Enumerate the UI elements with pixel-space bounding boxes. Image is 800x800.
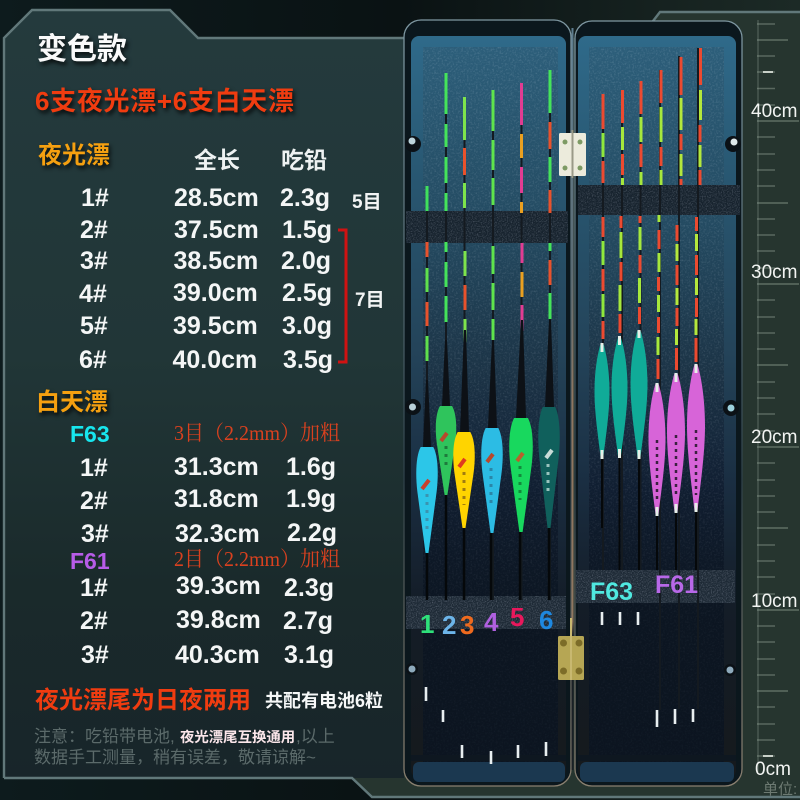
float F63-2: [612, 90, 628, 570]
box spine: [572, 28, 574, 770]
row 1: 1.6g: [286, 453, 336, 481]
label: F63 on box: F63: [590, 578, 633, 606]
row 6: 40.0cm: [172, 346, 257, 374]
row 1: 1#: [80, 454, 108, 482]
panel: right lid of float box: [575, 21, 742, 786]
float 2: [436, 73, 456, 600]
float 6: [538, 70, 560, 600]
label: 40cm: 40cm: [751, 101, 797, 122]
row 3: 2.0g: [281, 247, 331, 275]
row 4: 2.5g: [282, 279, 332, 307]
row 5: 3.0g: [282, 312, 332, 340]
row 1: 2.3g: [284, 574, 334, 602]
heading: night floats: 夜光漂: [38, 142, 110, 169]
panel: left lid of float box: [404, 20, 571, 786]
row 1: [81, 184, 330, 212]
column header: length: 全长: [194, 147, 240, 173]
row 5: 5#: [80, 312, 108, 340]
heading: day floats: 白天漂: [36, 389, 108, 416]
bracket: rows 2 to 6: [338, 230, 346, 362]
row 1: 1#: [80, 574, 108, 602]
row 2: [80, 216, 332, 244]
number 6: 6: [539, 605, 553, 635]
number 1: 1: [420, 609, 434, 639]
row 1: 1#: [81, 184, 109, 212]
float 5: [509, 83, 533, 600]
row 2: [80, 606, 333, 635]
row 5: 39.5cm: [173, 312, 258, 340]
row 1: [80, 572, 334, 602]
label: 30cm: 30cm: [751, 262, 797, 283]
ruler backdrop: [352, 12, 800, 797]
table: F61: [80, 572, 334, 669]
row 2: 1.9g: [286, 485, 336, 513]
row 3: 3#: [81, 520, 109, 548]
row 1: 31.3cm: [174, 453, 259, 481]
row 2: 2.7g: [283, 607, 333, 635]
row 2: 39.8cm: [176, 606, 261, 634]
row 6: [79, 346, 333, 374]
note: 5 mesh: 5目: [352, 192, 382, 213]
number 4: 4: [484, 607, 499, 637]
night floats group: [416, 70, 560, 600]
row 3: 3#: [80, 247, 108, 275]
label: F63: F63: [70, 421, 110, 447]
row 6: 3.5g: [283, 346, 333, 374]
note: F61 spec: 2目（2.2mm）加粗: [174, 547, 340, 571]
float tail tips: [426, 612, 693, 764]
footnote: ,以上: [296, 727, 335, 746]
subtitle: 6支夜光漂+6支白天漂: [35, 86, 294, 116]
number 2: 2: [442, 610, 456, 640]
label: 20cm: 20cm: [751, 427, 797, 448]
label: F61 on box: F61: [655, 571, 698, 599]
row 2: 1.5g: [282, 216, 332, 244]
row 3: [81, 641, 334, 669]
footnote: 注意：吃铅带电池,: [34, 727, 175, 746]
footnote: [34, 727, 335, 767]
panel: specification frame: [4, 10, 404, 778]
icon: white top hinge: [559, 130, 586, 178]
callout: day and night use: 夜光漂尾为日夜两用: [35, 687, 251, 714]
row 3: [81, 519, 337, 548]
row 2: 2#: [80, 607, 108, 635]
label: 0cm: 0cm: [755, 759, 791, 780]
float F61-3: [687, 48, 705, 709]
row 2: 37.5cm: [174, 216, 259, 244]
float 4: [481, 90, 503, 600]
row 2: 2#: [80, 487, 108, 515]
label: F61: F61: [70, 548, 110, 574]
row 3: [80, 247, 331, 275]
float 3: [453, 97, 475, 600]
row 3: 32.3cm: [175, 520, 260, 548]
column header: lead weight: 吃铅: [281, 147, 327, 173]
ruler: [751, 20, 799, 798]
row 3: 3.1g: [284, 641, 334, 669]
float 1: [416, 186, 438, 600]
row 5: [80, 312, 332, 340]
icon: brass bottom hinge: [558, 618, 584, 680]
F63 floats group: [594, 81, 648, 570]
icon: box pegs: [405, 136, 741, 676]
foam straps: [406, 185, 740, 629]
row 1: 28.5cm: [174, 184, 259, 212]
label: 10cm: 10cm: [751, 591, 797, 612]
float F63-1: [594, 94, 610, 570]
title: 变色款: [37, 33, 127, 66]
label: unit: 单位:: [763, 781, 797, 798]
note: 7 mesh: 7目: [355, 290, 385, 311]
footnote: 数据手工测量，稍有误差，敬请谅解~: [34, 748, 316, 767]
float numbers: [420, 602, 553, 640]
row 1: 2.3g: [280, 184, 330, 212]
F61 floats group: [648, 48, 705, 710]
float F61-2: [667, 56, 685, 709]
row 2: 2#: [80, 216, 108, 244]
table: F63: [80, 453, 337, 548]
row 3: 38.5cm: [174, 247, 258, 275]
row 3: 3#: [81, 641, 109, 669]
float F61-1: [648, 70, 666, 710]
note: F63 spec: 3目（2.2mm）加粗: [174, 421, 340, 445]
table: night floats: [79, 184, 333, 374]
row 4: 39.0cm: [173, 279, 258, 307]
row 4: 4#: [79, 280, 107, 308]
row 4: [79, 279, 332, 308]
row 1: 39.3cm: [176, 572, 261, 600]
row 2: 31.8cm: [174, 485, 259, 513]
row 6: 6#: [79, 346, 107, 374]
number 5: 5: [510, 602, 524, 632]
row 3: 40.3cm: [175, 641, 260, 669]
footnote highlight: 夜光漂尾互换通用: [180, 728, 295, 746]
row 2: [80, 485, 336, 515]
number 3: 3: [460, 610, 474, 640]
float F63-3: [630, 81, 648, 570]
row 3: 2.2g: [287, 519, 337, 547]
callout: batteries: 共配有电池6粒: [265, 690, 383, 711]
row 1: [80, 453, 336, 482]
